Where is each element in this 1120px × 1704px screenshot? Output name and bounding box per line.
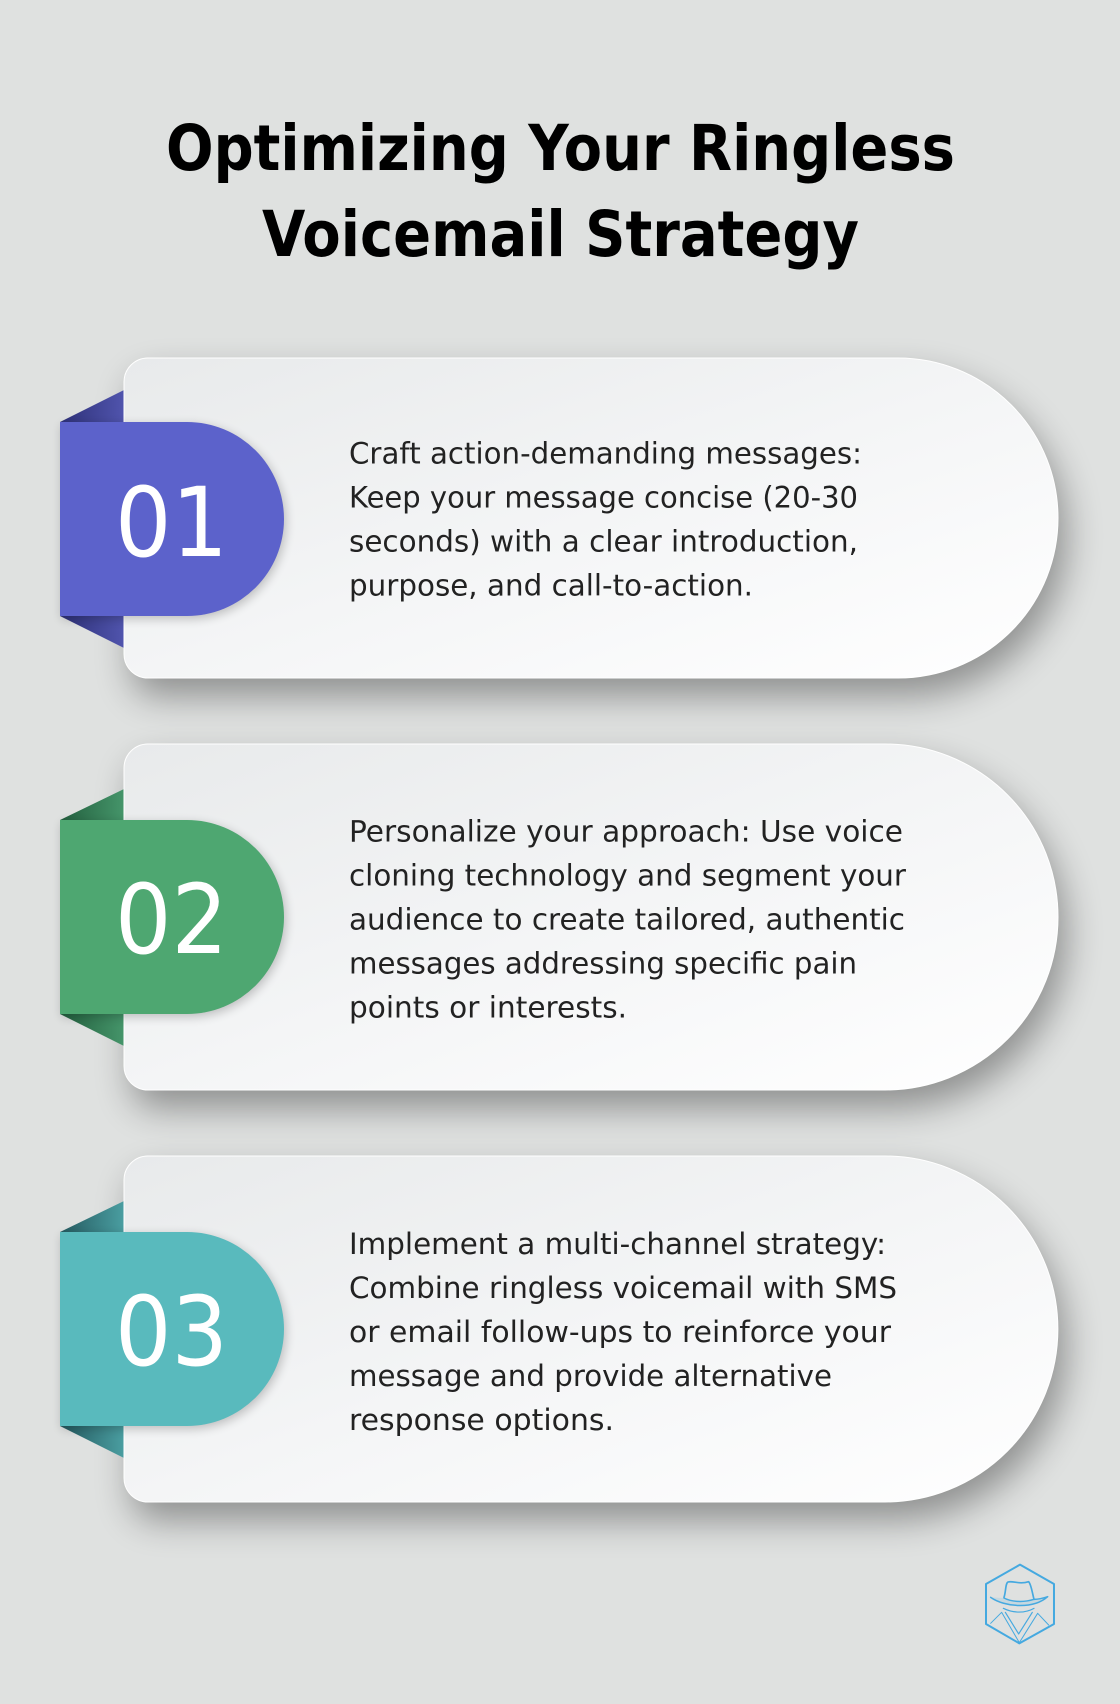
- number 03: 03: [115, 1276, 228, 1388]
- card shadow 02: [132, 762, 1066, 1108]
- badge 02: [60, 820, 284, 1014]
- number 02: 02: [115, 864, 228, 976]
- icon: hexagon spy logo: [986, 1565, 1054, 1643]
- badge shadow 03: [62, 1235, 286, 1429]
- text 02: audience to create tailored, authentic: [349, 902, 905, 936]
- text 01: Craft action-demanding messages:: [349, 436, 862, 470]
- text 01: [349, 436, 862, 602]
- badge shadow 02: [62, 823, 286, 1017]
- title: Optimizing Your Ringless: [166, 112, 955, 185]
- text 02: Personalize your approach: Use voice: [349, 814, 903, 848]
- text 03: Combine ringless voicemail with SMS: [349, 1271, 897, 1305]
- card 03: [124, 1156, 1058, 1502]
- panel: step 01: [60, 358, 1066, 696]
- panel: step 03: [60, 1156, 1066, 1520]
- badge 03: [60, 1232, 284, 1426]
- title: Voicemail Strategy: [262, 198, 859, 271]
- text 02: messages addressing specific pain: [349, 946, 857, 980]
- text 02: [349, 814, 906, 1024]
- text 03: Implement a multi-channel strategy:: [349, 1227, 886, 1261]
- text 03: response options.: [349, 1403, 614, 1437]
- text 03: or email follow-ups to reinforce your: [349, 1315, 891, 1349]
- text 02: cloning technology and segment your: [349, 858, 906, 892]
- text 01: Keep your message concise (20-30: [349, 480, 858, 514]
- fold 01: [60, 390, 124, 648]
- card shadow 01: [132, 376, 1066, 696]
- fold 03: [60, 1201, 124, 1458]
- text 02: points or interests.: [349, 990, 627, 1024]
- badge 01: [60, 422, 284, 616]
- text 01: seconds) with a clear introduction,: [349, 524, 858, 558]
- panel: step 02: [60, 744, 1066, 1108]
- title: [166, 112, 955, 271]
- badge shadow 01: [62, 425, 286, 619]
- fold 02: [60, 789, 124, 1046]
- card 01: [124, 358, 1058, 678]
- text 01: purpose, and call-to-action.: [349, 568, 753, 602]
- card 02: [124, 744, 1058, 1090]
- text 03: message and provide alternative: [349, 1359, 832, 1393]
- text 03: [349, 1227, 897, 1437]
- card shadow 03: [132, 1174, 1066, 1520]
- number 01: 01: [115, 467, 228, 579]
